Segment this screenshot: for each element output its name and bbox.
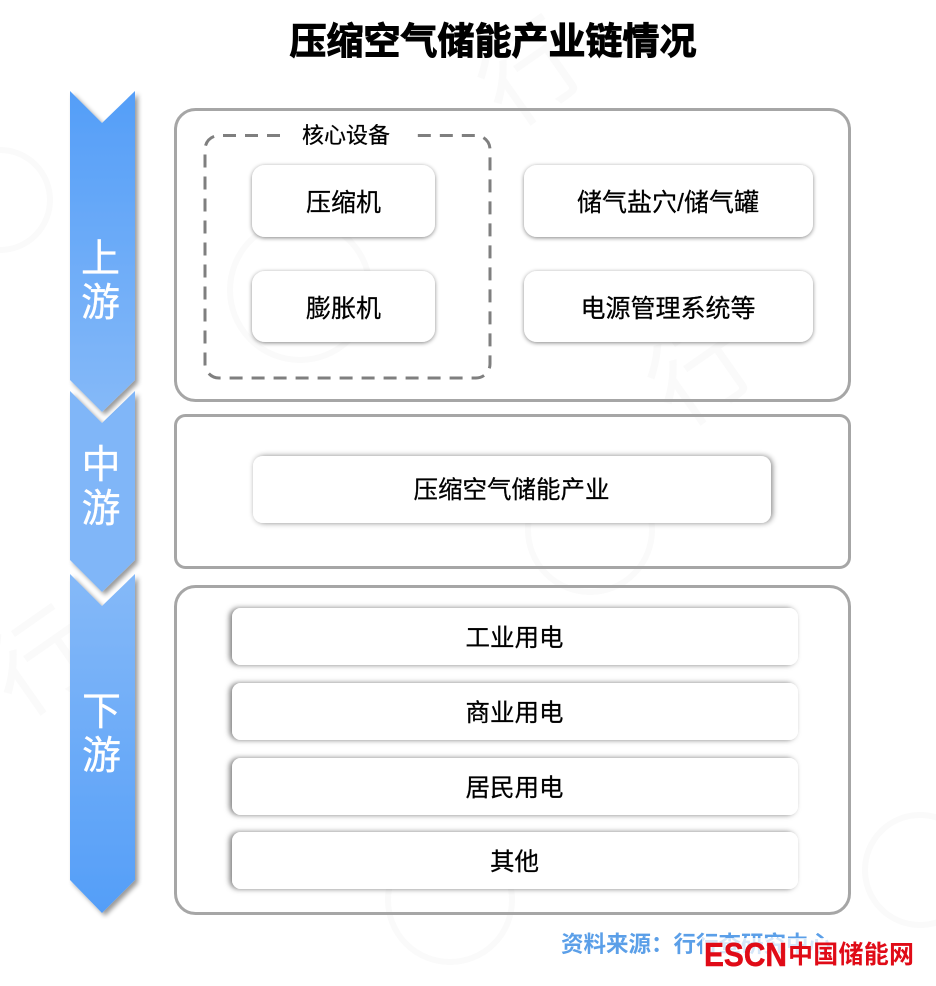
arrow: midstream: 游 — [81, 488, 121, 531]
panel: midstream — [176, 416, 850, 568]
box: industrial: 工业用电 — [466, 624, 564, 652]
dashed group: core equipment: 核心设备 — [302, 123, 390, 148]
panel: downstream — [176, 586, 850, 914]
watermark: 行 — [458, 0, 605, 148]
box: commercial: 商业用电 — [466, 699, 564, 727]
arrow: upstream — [70, 91, 135, 412]
panel: upstream — [176, 110, 850, 400]
box: CAES industry — [253, 456, 771, 523]
dashed group: core equipment — [205, 123, 490, 378]
box: compressor: 压缩机 — [306, 189, 381, 217]
box: storage: 储气盐穴/储气罐 — [577, 189, 759, 217]
arrow: downstream: 下 — [82, 691, 121, 734]
arrow: downstream: 游 — [82, 735, 121, 778]
arrow: upstream: 游 — [81, 282, 120, 325]
box: residential — [232, 758, 798, 815]
title: 压缩空气储能产业链情况 — [290, 21, 696, 62]
watermark: 行 — [628, 299, 775, 448]
box: expander: 膨胀机 — [306, 295, 381, 323]
box: power management — [524, 271, 813, 342]
arrow: downstream — [70, 574, 135, 913]
box: expander — [252, 271, 435, 342]
box: CAES industry: 压缩空气储能产业 — [414, 476, 610, 504]
box: other: 其他 — [490, 848, 539, 876]
arrow: upstream: 上 — [81, 238, 120, 281]
box: other — [232, 832, 798, 889]
logo: ESCN: 中国储能网 — [788, 941, 914, 969]
logo: ESCN — [702, 936, 916, 973]
source note: 资料来源：行行查研究中心 — [561, 927, 832, 959]
box: storage — [524, 165, 813, 237]
arrow: midstream: 中 — [81, 444, 121, 487]
box: power management: 电源管理系统等 — [580, 295, 756, 323]
box: commercial — [232, 683, 798, 740]
box: compressor — [252, 165, 435, 237]
box: residential: 居民用电 — [466, 774, 564, 802]
logo: ESCN: ESCN — [704, 936, 787, 973]
box: industrial — [232, 608, 798, 665]
arrow: midstream — [70, 391, 135, 592]
